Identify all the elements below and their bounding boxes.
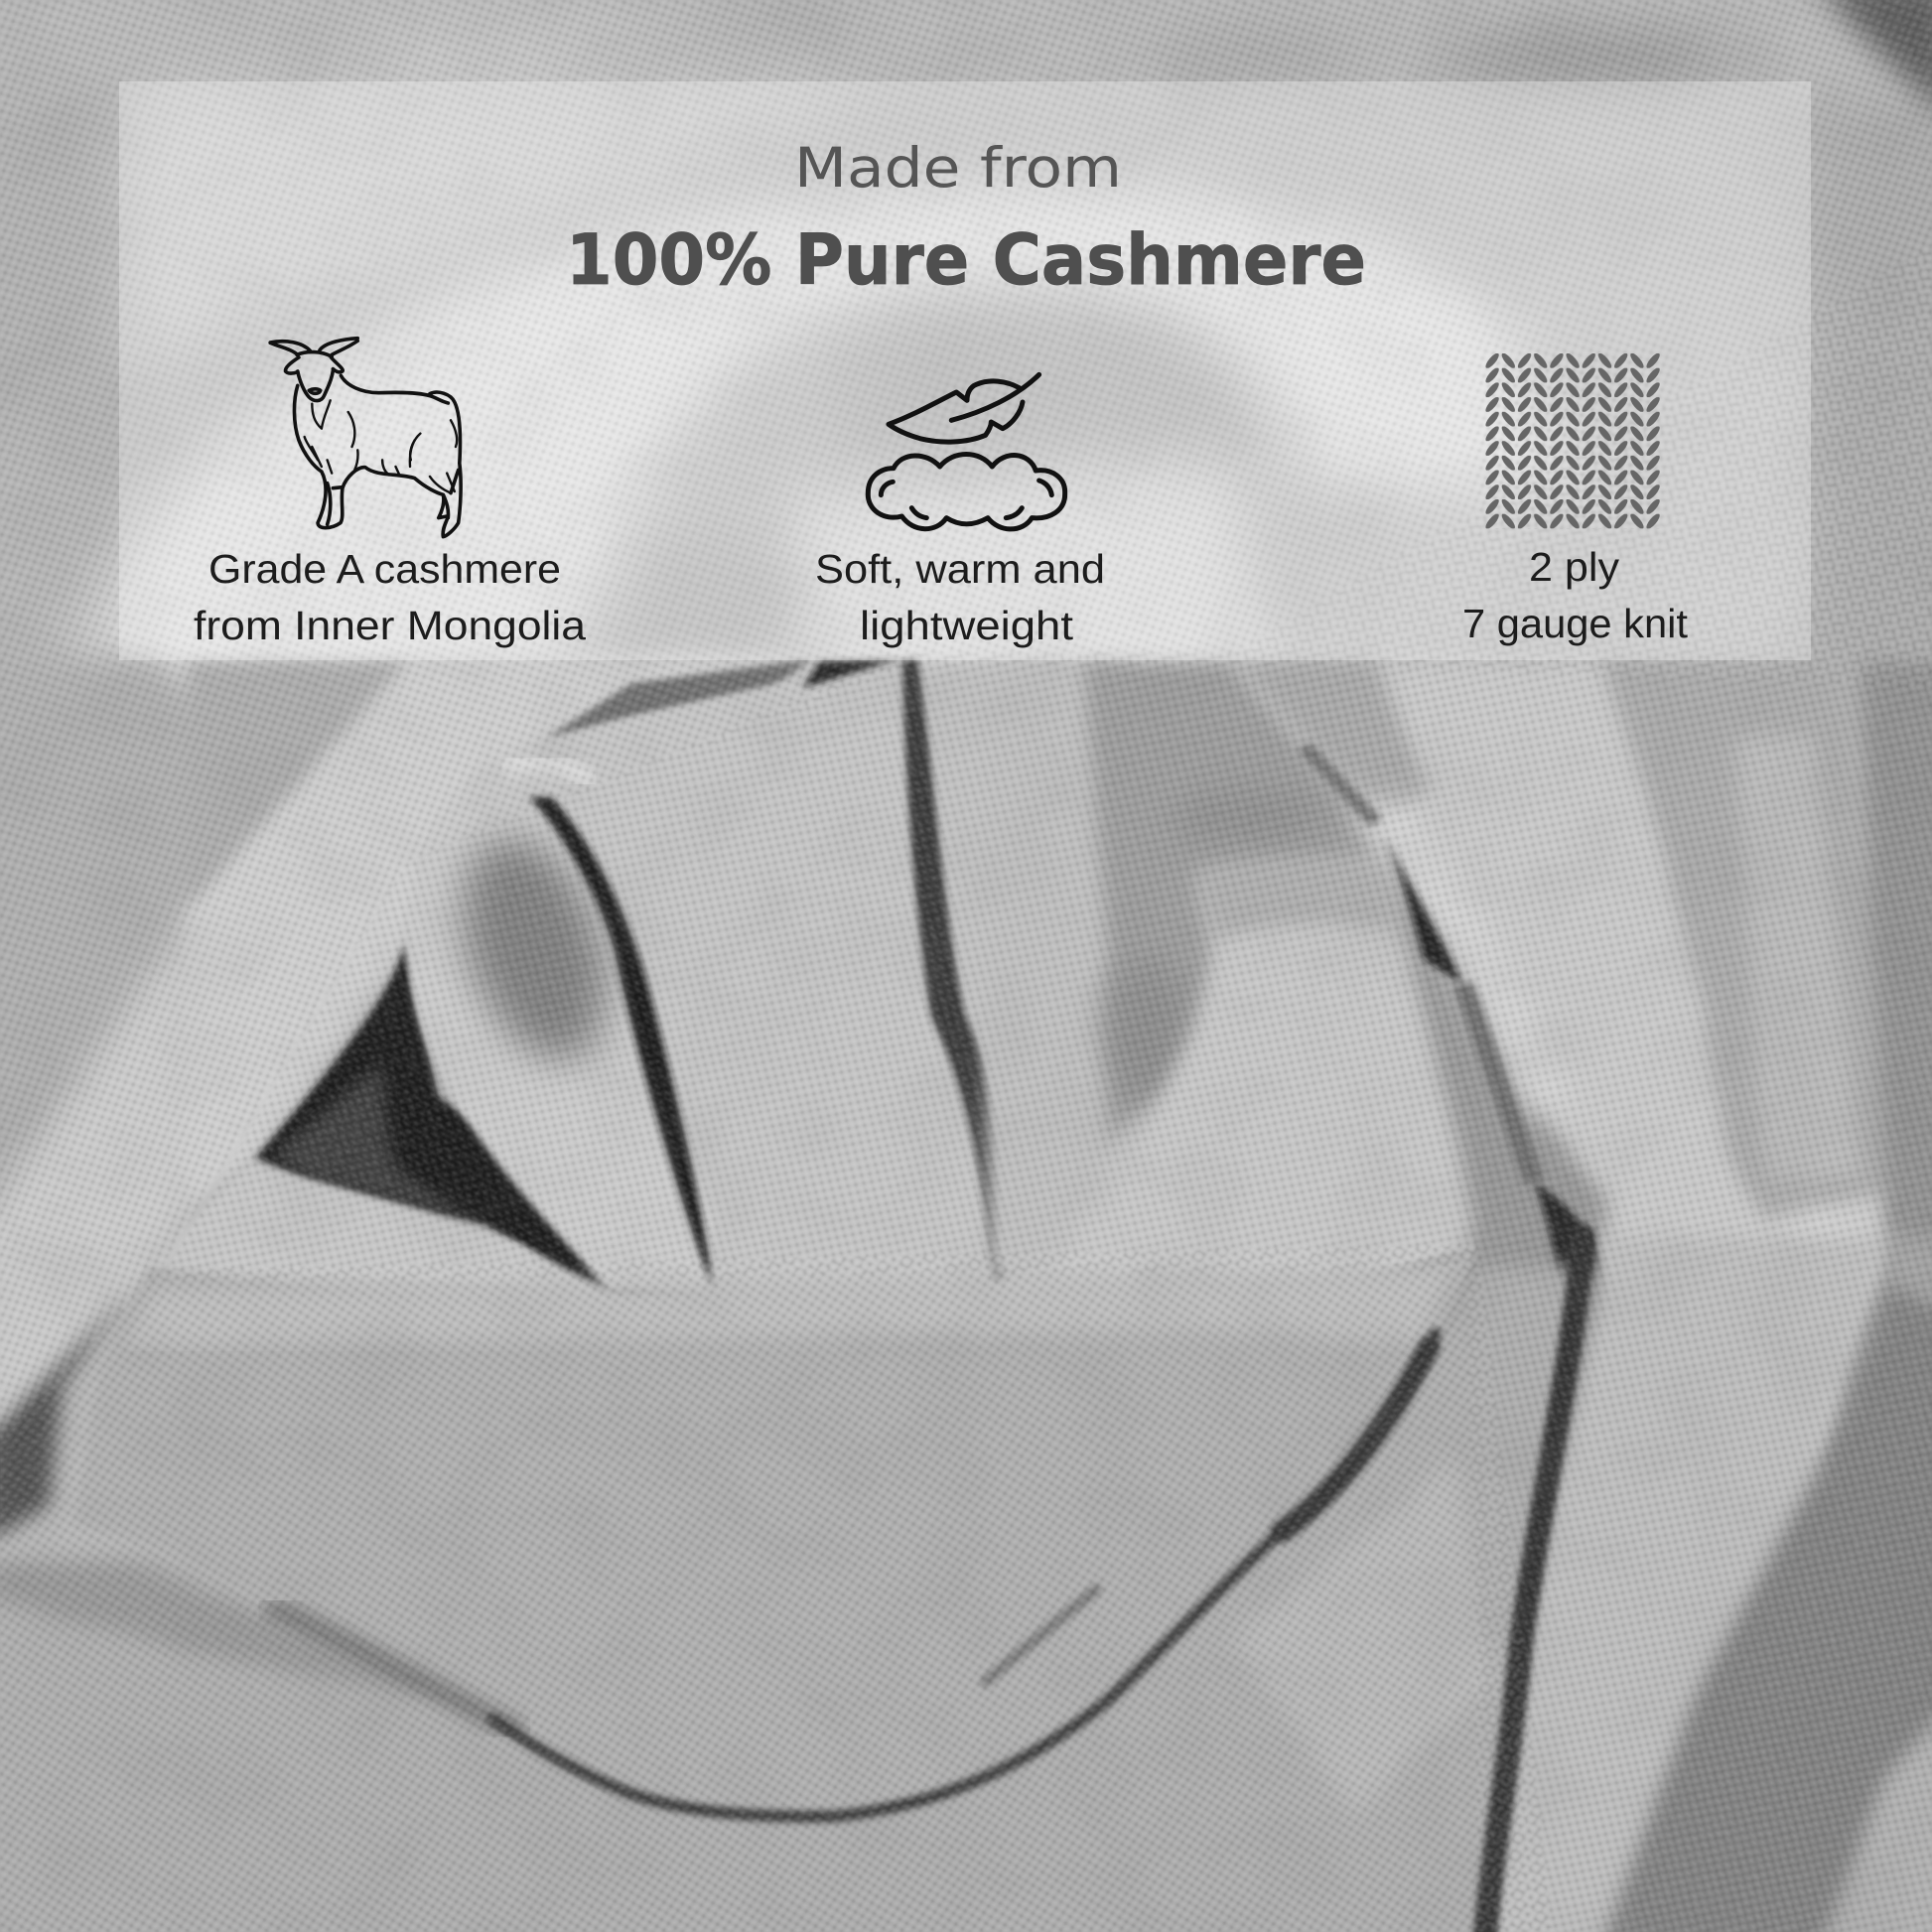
rose folds [148, 659, 1133, 1405]
icon: knit stitch swatch [1484, 353, 1661, 528]
feather [889, 374, 1039, 442]
title: Made from: Made from [794, 136, 1122, 200]
heading: 100% Pure Cashmere: 100% Pure Cashmere [566, 219, 1366, 301]
cloud [868, 454, 1065, 529]
text: 2 ply 7 gauge knit: 2 ply [1529, 544, 1620, 590]
icon: feather above cloud [868, 374, 1065, 529]
text: 2 ply 7 gauge knit: 7 gauge knit [1462, 601, 1689, 646]
icon: cashmere goat [270, 339, 461, 537]
top area tones [0, 0, 1932, 727]
text: Grade A cashmere from Inner Mongolia: Grade A cashmere [208, 546, 561, 592]
text: Soft, warm and lightweight: Soft, warm and [815, 546, 1105, 592]
left fold band [0, 655, 854, 1459]
lower folds [0, 1237, 1932, 1932]
panel: translucent white header band [119, 81, 1811, 660]
text: Grade A cashmere from Inner Mongolia: from Inner Mongolia [194, 603, 586, 648]
right folds [987, 661, 1932, 1465]
top-right dark corner [1817, 0, 1932, 119]
text: Soft, warm and lightweight: lightweight [860, 603, 1074, 648]
